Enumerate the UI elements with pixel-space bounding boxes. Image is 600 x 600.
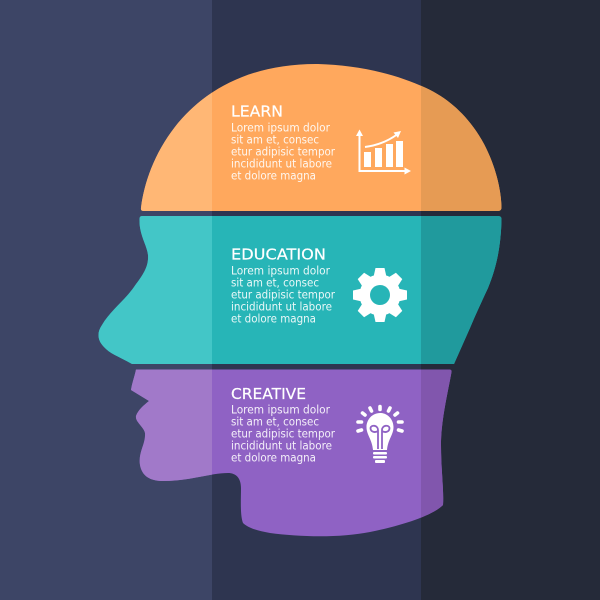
text block: creative: Lorem ipsum dolor	[231, 402, 330, 416]
purple jaw and neck shape	[131, 370, 452, 536]
icon: light bulb	[358, 406, 402, 463]
text block: creative: incididunt ut labore	[231, 438, 332, 452]
heading: creative: CREATIVE	[231, 385, 306, 403]
teal face shape	[98, 216, 502, 364]
text block: creative	[231, 402, 335, 464]
text block: learn	[231, 120, 335, 182]
text block: education: Lorem ipsum dolor	[231, 264, 330, 278]
text block: creative: etur adipisic tempor	[231, 426, 335, 440]
icon: gear	[353, 268, 407, 322]
text block: education: etur adipisic tempor	[231, 288, 335, 302]
panel: learn	[141, 64, 502, 211]
text block: education: et dolore magna	[231, 312, 316, 326]
text block: learn: et dolore magna	[231, 168, 316, 182]
heading: learn: LEARN	[231, 102, 283, 120]
text block: creative: et dolore magna	[231, 450, 316, 464]
panel: education	[98, 216, 502, 364]
orange cranium shape	[141, 64, 502, 211]
text block: education: incididunt ut labore	[231, 300, 332, 314]
text block: learn: incididunt ut labore	[231, 156, 332, 170]
text block: learn: Lorem ipsum dolor	[231, 120, 330, 134]
text block: learn: sit am et, consec	[231, 132, 319, 146]
text block: education: sit am et, consec	[231, 276, 319, 290]
text block: creative: sit am et, consec	[231, 414, 319, 428]
panel: creative	[131, 370, 452, 536]
heading: education: EDUCATION	[231, 246, 326, 264]
icon: bar chart with rising arrow	[356, 130, 411, 174]
text block: learn: etur adipisic tempor	[231, 144, 335, 158]
text block: education	[231, 264, 335, 326]
